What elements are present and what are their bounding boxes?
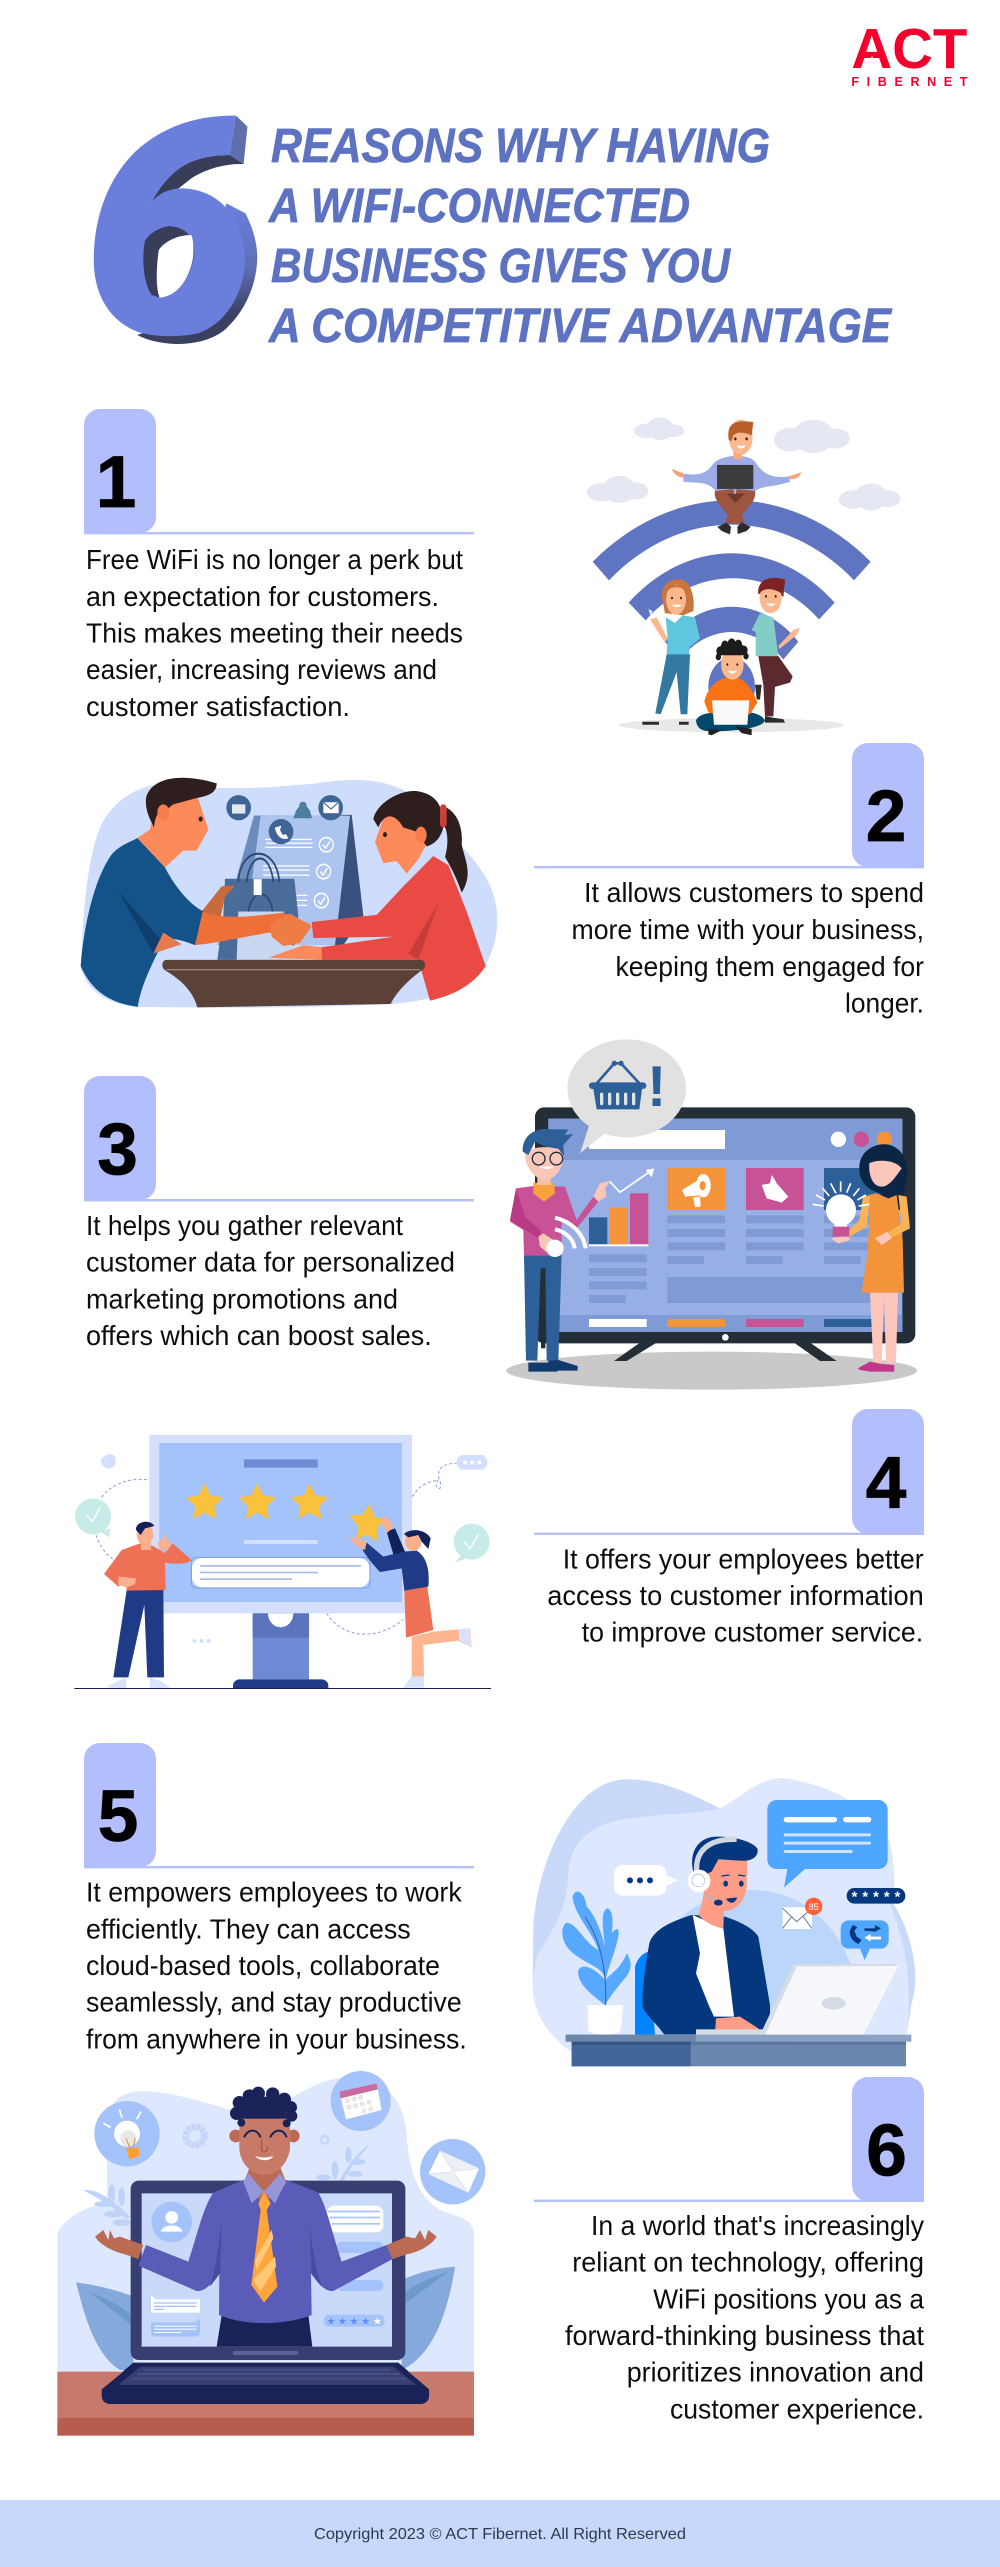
woman with light bulb bbox=[813, 1132, 910, 1372]
illustration: people on wifi symbol bbox=[587, 417, 900, 735]
floor shadow bbox=[506, 1352, 917, 1390]
text: reason 5: cloud-based tools, collaborate bbox=[86, 1950, 440, 1981]
text: reason 4: It offers your employees better bbox=[563, 1543, 924, 1574]
title: BUSINESS GIVES YOU bbox=[271, 240, 731, 293]
man with phone bbox=[752, 578, 800, 723]
text: reason 3: marketing promotions and bbox=[86, 1283, 398, 1314]
illustration: customer star ratings on monitor bbox=[74, 1435, 491, 1689]
number badge 4 bbox=[852, 1409, 924, 1534]
number badge 1 bbox=[84, 409, 156, 533]
panel: reason 1 bbox=[84, 409, 474, 722]
password stars: ***** bbox=[852, 1890, 901, 1906]
text: reason 1: an expectation for customers. bbox=[86, 581, 439, 612]
panel: reason 6 bbox=[534, 2077, 925, 2424]
title: A WIFI-CONNECTED bbox=[268, 180, 690, 233]
text: reason 2: more time with your business, bbox=[572, 914, 924, 945]
chat bubble large bbox=[767, 1800, 888, 1888]
stars bbox=[186, 1483, 386, 1542]
footer bbox=[0, 2500, 1000, 2567]
text: reason 6: reliant on technology, offering bbox=[572, 2247, 924, 2278]
laptop: ★ bbox=[338, 2316, 347, 2327]
wifi arcs bbox=[593, 500, 871, 716]
text: reason 2: It allows customers to spend bbox=[584, 877, 924, 908]
text: reason 5: efficiently. They can access bbox=[86, 1913, 411, 1944]
text: reason 4 bbox=[547, 1543, 924, 1648]
desk bbox=[566, 2035, 911, 2066]
panel: reason 4 bbox=[534, 1409, 924, 1648]
speech bubble with basket: ! bbox=[647, 1055, 666, 1119]
woman with phone bbox=[642, 579, 700, 725]
logo: ACT Fibernet: ACT bbox=[851, 17, 968, 81]
text: reason 2: keeping them engaged for bbox=[616, 951, 924, 982]
text: reason 4: access to customer information bbox=[547, 1580, 924, 1611]
text: reason 3: It helps you gather relevant bbox=[86, 1210, 403, 1241]
woman bbox=[268, 791, 486, 1001]
ground line bbox=[74, 1688, 491, 1689]
text: reason 4: to improve customer service. bbox=[582, 1617, 923, 1648]
text: reason 6: forward-thinking business that bbox=[565, 2320, 924, 2351]
text: reason 1: easier, increasing reviews and bbox=[86, 654, 437, 685]
laptop: ★ bbox=[327, 2316, 336, 2327]
desk bbox=[57, 2372, 474, 2436]
shopping bags bbox=[217, 854, 298, 960]
illustration: call centre agent at laptop bbox=[533, 1778, 915, 2066]
text: reason 6: In a world that's increasingly bbox=[591, 2210, 924, 2241]
table bbox=[162, 960, 425, 1007]
chat bubble dots bbox=[614, 1865, 678, 1896]
clouds bbox=[587, 417, 900, 510]
panel: reason 3 bbox=[84, 1076, 474, 1351]
handshake hands bbox=[270, 914, 312, 946]
ground shadow bbox=[619, 718, 844, 732]
laptop bbox=[131, 2181, 405, 2360]
illustration: handshake with shop bags bbox=[81, 778, 497, 1008]
monitor bbox=[535, 1107, 915, 1343]
text: reason 1: This makes meeting their needs bbox=[86, 618, 463, 648]
keyboard base bbox=[101, 2363, 429, 2404]
text: reason 3: offers which can boost sales. bbox=[86, 1320, 432, 1351]
title: REASONS WHY HAVING bbox=[271, 120, 770, 173]
footer: Copyright 2023 © ACT Fibernet. All Right Reserved bbox=[314, 2526, 686, 2543]
text: reason 6: customer experience. bbox=[670, 2393, 924, 2424]
title: A COMPETITIVE ADVANTAGE bbox=[268, 300, 893, 353]
text: reason 6 bbox=[565, 2210, 925, 2424]
text: reason 5: It empowers employees to work bbox=[86, 1877, 462, 1908]
floating icons bbox=[94, 2071, 485, 2204]
text: reason 1 bbox=[86, 544, 463, 722]
icon: thumbs up bbox=[762, 1175, 788, 1203]
text: reason 6: prioritizes innovation and bbox=[627, 2357, 924, 2388]
number badge 3: 3 bbox=[97, 1109, 138, 1190]
laptop: ★ bbox=[361, 2316, 370, 2327]
illustration: people presenting on a big screen bbox=[506, 1039, 917, 1390]
panel: reason 2 bbox=[534, 743, 924, 1018]
logo: ACT Fibernet: FIBERNET bbox=[851, 75, 968, 89]
text: reason 5: seamlessly, and stay productive bbox=[86, 1987, 462, 2018]
man thumbs up bbox=[104, 1522, 192, 1688]
number badge 3 bbox=[84, 1076, 156, 1200]
background blob bbox=[81, 780, 497, 1008]
dashed lines bbox=[96, 1463, 457, 1634]
envelope with 85 badge bbox=[783, 1898, 822, 1929]
big numeral 6 bbox=[94, 116, 257, 344]
number badge 5: 5 bbox=[98, 1776, 138, 1857]
number badge 2: 2 bbox=[866, 776, 906, 857]
chat bubbles with checks bbox=[75, 1454, 490, 1643]
text: reason 6: WiFi positions you as a bbox=[653, 2283, 925, 2314]
title bbox=[268, 120, 893, 353]
phone bubble bbox=[841, 1920, 889, 1960]
illustration: man emerging from laptop bbox=[57, 2071, 485, 2436]
text: reason 3 bbox=[86, 1210, 455, 1351]
man bbox=[81, 778, 310, 1007]
clipboard bbox=[217, 802, 363, 945]
sprigs and gears bbox=[83, 2145, 368, 2226]
top man with laptop bbox=[672, 419, 802, 534]
background blob bbox=[57, 2076, 474, 2372]
text: reason 1: Free WiFi is no longer a perk but bbox=[86, 544, 463, 575]
plant bbox=[562, 1891, 631, 2035]
icon: wifi symbol bbox=[555, 1218, 586, 1248]
text: reason 5: from anywhere in your business. bbox=[86, 2023, 467, 2054]
text: reason 2: longer. bbox=[845, 988, 924, 1018]
man sitting with laptop bbox=[696, 638, 765, 735]
bar chart bbox=[589, 1168, 654, 1246]
icons bbox=[226, 795, 343, 844]
number badge 6 bbox=[852, 2077, 924, 2201]
speech bubble with basket bbox=[567, 1039, 686, 1153]
agent bbox=[642, 1837, 770, 2035]
man with glasses bbox=[510, 1129, 611, 1372]
number badge 4: 4 bbox=[866, 1443, 907, 1524]
text: reason 1: customer satisfaction. bbox=[86, 691, 350, 722]
panel: reason 5 bbox=[84, 1743, 474, 2054]
text: reason 5 bbox=[86, 1877, 467, 2054]
text: reason 3: customer data for personalized bbox=[86, 1247, 455, 1278]
laptop bbox=[696, 1964, 898, 2035]
laptop: ★ bbox=[350, 2316, 359, 2327]
chair bbox=[635, 1952, 655, 2035]
icon: megaphone bbox=[682, 1174, 711, 1207]
number badge 5 bbox=[84, 1743, 156, 1867]
comment box bbox=[191, 1557, 370, 1588]
number badge 6: 6 bbox=[866, 2110, 907, 2192]
man bbox=[95, 2087, 437, 2347]
text: reason 2 bbox=[572, 877, 924, 1018]
envelope with 85 badge: 85 bbox=[808, 1902, 819, 1912]
background blobs bbox=[533, 1778, 915, 2053]
leaves bbox=[76, 2267, 455, 2370]
laptop: ★ bbox=[373, 2316, 382, 2327]
woman holding star bbox=[349, 1516, 472, 1688]
number badge 1: 1 bbox=[96, 442, 136, 523]
number badge 2 bbox=[852, 743, 924, 867]
monitor bbox=[149, 1435, 412, 1688]
screen stand bbox=[614, 1343, 837, 1361]
